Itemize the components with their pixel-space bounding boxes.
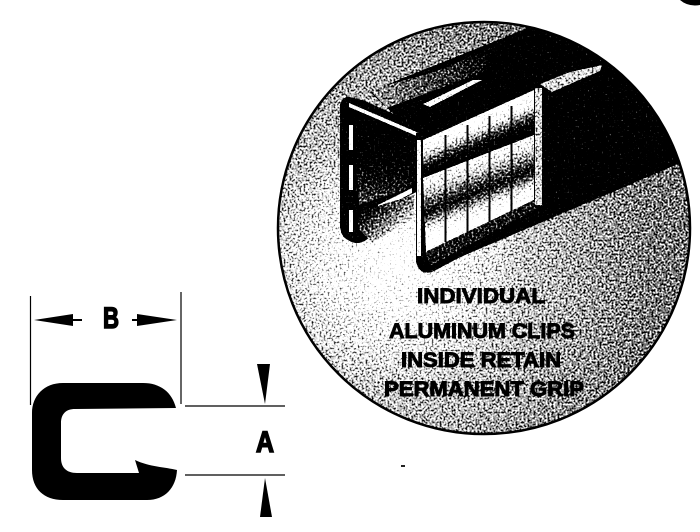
frame highlights	[349, 103, 419, 232]
circle outline	[278, 22, 690, 434]
caption: ALUMINUM CLIPS	[389, 320, 575, 343]
clips lower half	[423, 135, 534, 252]
caption: PERMANENT GRIP	[384, 378, 584, 401]
clip separators	[444, 106, 512, 242]
caption: INSIDE RETAIN	[401, 349, 561, 372]
mottled top face of trim	[370, 46, 495, 108]
lower inner wall	[358, 195, 414, 243]
bottom lip	[425, 200, 544, 266]
front frame	[340, 97, 420, 243]
circular detail illustration	[270, 15, 700, 440]
dimension B: B	[103, 302, 119, 335]
speckled highlight on trim	[540, 65, 602, 92]
extension lines	[30, 292, 285, 475]
inner opening	[356, 130, 416, 205]
clip highlight	[423, 80, 482, 107]
C profile	[32, 383, 177, 500]
shell left rim	[417, 140, 421, 256]
dimension A	[256, 364, 274, 517]
caption	[384, 285, 584, 401]
caption: INDIVIDUAL	[417, 285, 545, 308]
speck	[401, 465, 405, 467]
trim body	[370, 20, 700, 273]
dimension A: A	[256, 426, 274, 459]
magnified trim photo	[270, 15, 700, 440]
clip outer shell	[416, 132, 464, 273]
corner mark	[680, 0, 700, 5]
dimension B	[34, 302, 177, 335]
trim cross-section diagram	[30, 292, 285, 517]
clips upper half	[423, 90, 534, 178]
shell right rim	[535, 88, 542, 205]
